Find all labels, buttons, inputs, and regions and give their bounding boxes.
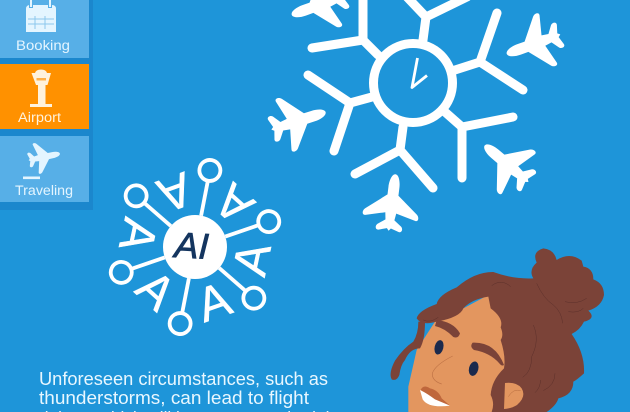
navigation panel [0,0,93,210]
spokes and nodes [108,158,282,336]
nose [432,356,453,384]
letters ring: A [108,214,167,256]
hair detail lines [423,282,587,393]
body text: thunderstorms, can lead to flight [39,388,309,408]
AI network badge [108,158,282,336]
mouth [420,390,450,406]
centre disc [163,215,227,279]
letters ring: A [190,273,238,333]
tab: traveling: Traveling [15,183,73,198]
tab: traveling [0,136,89,202]
body text: Unforeseen circumstances, such as [39,369,328,389]
airplanes around snowflake [263,0,570,234]
body text [39,369,339,412]
hair [417,248,604,412]
AI label: AI [172,224,210,267]
tab: booking [0,0,89,58]
tab: booking: Booking [16,38,70,53]
woman illustration [391,248,604,412]
ear [504,383,523,409]
letters ring: A [205,173,264,234]
eyes [433,339,445,355]
loose strand [391,322,425,380]
tab: airport [0,64,89,129]
letters ring [108,161,282,333]
eyebrows [435,320,460,338]
snowflake branches [308,0,523,188]
face [408,295,510,412]
snowflake clock [308,0,523,188]
letters ring: A [126,260,185,321]
clock ring [374,44,452,122]
letters ring: A [223,238,282,280]
tab: airport: Airport [18,110,61,125]
letters ring: A [151,161,199,222]
clock hands [412,58,427,88]
